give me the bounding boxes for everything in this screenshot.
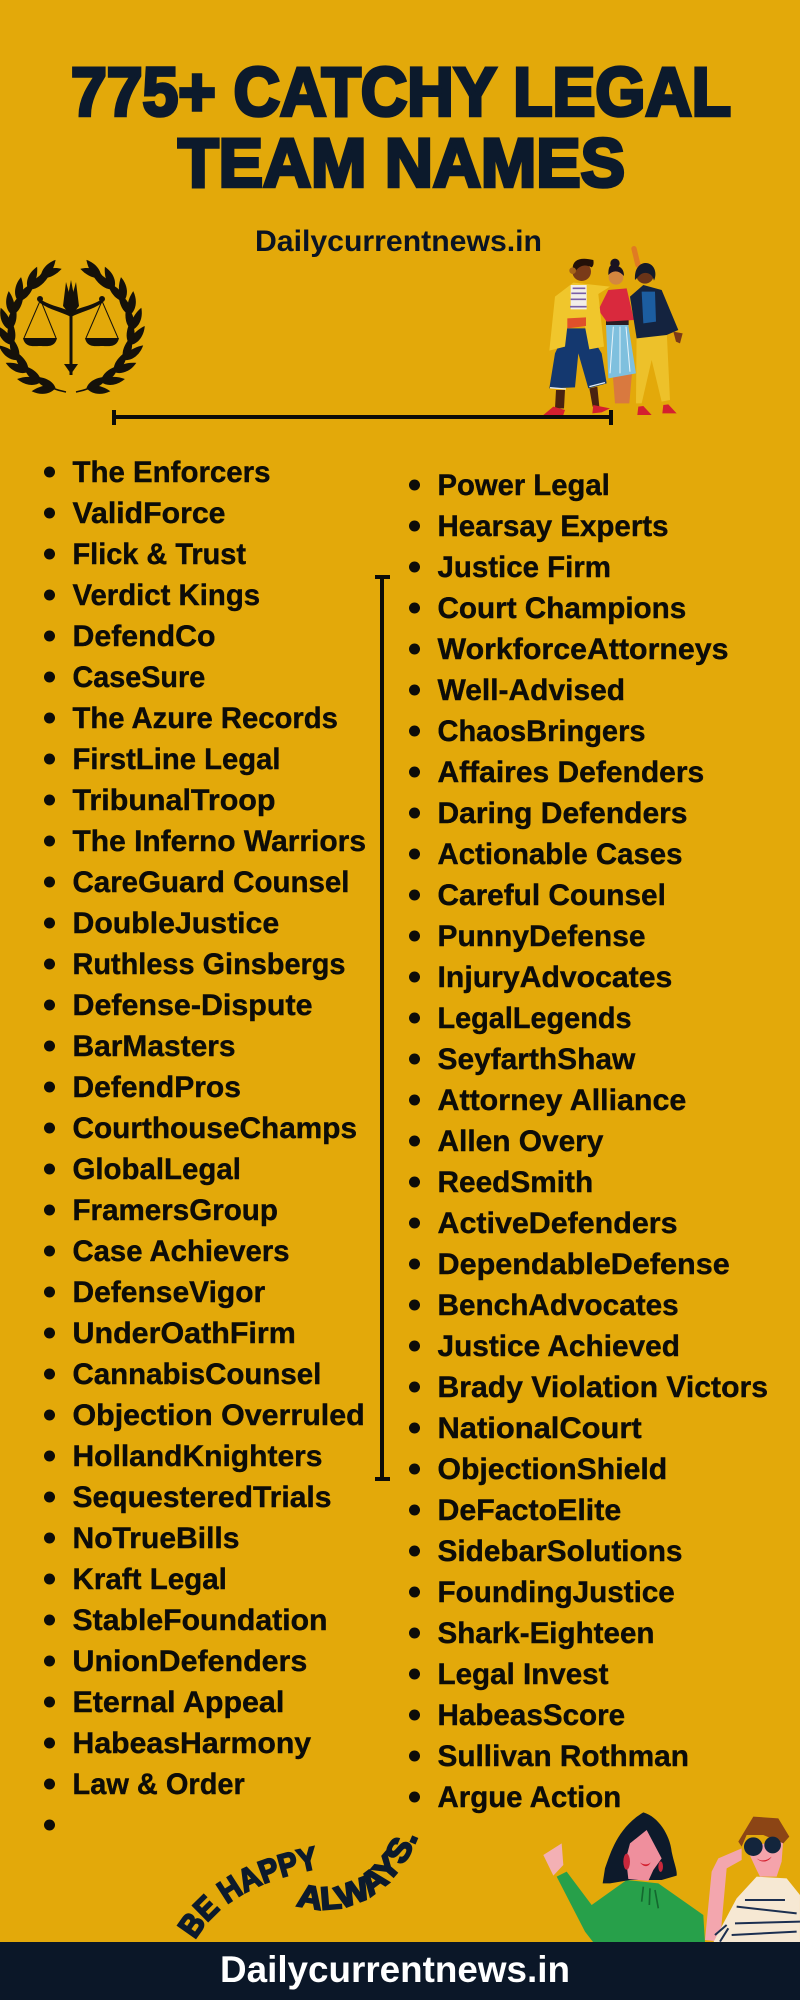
item: Actionable Cases [438,838,682,871]
item: Shark-Eighteen [438,1617,654,1650]
item: Affaires Defenders [438,756,704,789]
item: Justice Achieved [438,1330,680,1363]
item: Defense-Dispute [72,989,312,1022]
illustration: two women [543,1812,800,1942]
item: FirstLine Legal [72,743,280,776]
item: HabeasScore [438,1699,625,1732]
item: Brady Violation Victors [438,1371,768,1404]
item: BarMasters [72,1030,236,1063]
item: CaseSure [72,661,205,694]
item: CannabisCounsel [72,1358,321,1391]
divider line: horizontal [114,410,611,425]
curved text: be happy always: ALWAYS. [295,1835,418,1911]
item: NationalCourt [438,1412,642,1445]
item: The Inferno Warriors [72,825,366,858]
item: DefendCo [72,620,216,653]
item: Daring Defenders [438,797,688,830]
empty bullet [44,1820,55,1830]
curved text: be happy always [176,1835,418,1940]
item: SeyfarthShaw [438,1043,636,1076]
item: Kraft Legal [72,1563,227,1596]
item: DefendPros [72,1071,241,1104]
item: WorkforceAttorneys [438,633,728,666]
item: SequesteredTrials [72,1481,332,1514]
item: Ruthless Ginsbergs [72,948,346,981]
item: ActiveDefenders [438,1207,678,1240]
item: HollandKnighters [72,1440,322,1473]
item: ObjectionShield [438,1453,667,1486]
list: left column of names [44,456,366,1830]
item: BenchAdvocates [438,1289,679,1322]
curved text: be happy always: BE HAPPY [176,1845,315,1940]
footer bar [0,1942,800,2000]
item: Sullivan Rothman [438,1740,689,1773]
item: Hearsay Experts [438,510,668,543]
item: DependableDefense [438,1248,730,1281]
item: Justice Firm [438,551,611,584]
friend one [543,259,610,415]
item: Flick & Trust [72,538,246,571]
item: CareGuard Counsel [72,866,350,899]
divider line: vertical [375,577,390,1479]
icon: scales of justice in laurel wreath [0,258,147,394]
item: Case Achievers [72,1235,290,1268]
item: DeFactoElite [438,1494,621,1527]
item: ValidForce [72,497,226,530]
item: PunnyDefense [438,920,646,953]
item: Legal Invest [438,1658,608,1691]
item: TribunalTroop [72,784,276,817]
item: FoundingJustice [438,1576,675,1609]
item: LegalLegends [438,1002,632,1035]
item: CourthouseChamps [72,1112,357,1145]
item: FramersGroup [72,1194,278,1227]
title: 775+ CATCHY LEGAL [71,54,731,130]
item: InjuryAdvocates [438,961,672,994]
item: Power Legal [438,469,610,502]
item: Attorney Alliance [438,1084,686,1117]
item: ReedSmith [438,1166,593,1199]
woman in green [543,1812,705,1942]
item: DefenseVigor [72,1276,266,1309]
item: SidebarSolutions [438,1535,682,1568]
list: right column of names [409,469,768,1814]
footer website name: Dailycurrentnews.in [220,1949,570,1990]
item: Law & Order [72,1768,245,1801]
item: Eternal Appeal [72,1686,284,1719]
item: UnderOathFirm [72,1317,296,1350]
item: Well-Advised [438,674,625,707]
woman in striped top [705,1817,800,1942]
item: Verdict Kings [72,579,260,612]
friend three [630,263,683,415]
item: GlobalLegal [72,1153,241,1186]
item: Objection Overruled [72,1399,365,1432]
title [71,54,731,202]
friend two: skirt and legs [598,259,636,403]
item: DoubleJustice [72,907,279,940]
item: The Azure Records [72,702,338,735]
item: Careful Counsel [438,879,666,912]
item: UnionDefenders [72,1645,307,1678]
item: The Enforcers [72,456,270,489]
item: StableFoundation [72,1604,328,1637]
title: TEAM NAMES [178,124,625,202]
item: Court Champions [438,592,686,625]
subtitle: website name: Dailycurrentnews.in [255,225,542,258]
item: Argue Action [438,1781,621,1814]
item: Allen Overy [438,1125,604,1158]
item: HabeasHarmony [72,1727,311,1760]
illustration: three friends [543,249,683,415]
item: NoTrueBills [72,1522,240,1555]
raised arm [634,249,638,265]
item: ChaosBringers [438,715,646,748]
